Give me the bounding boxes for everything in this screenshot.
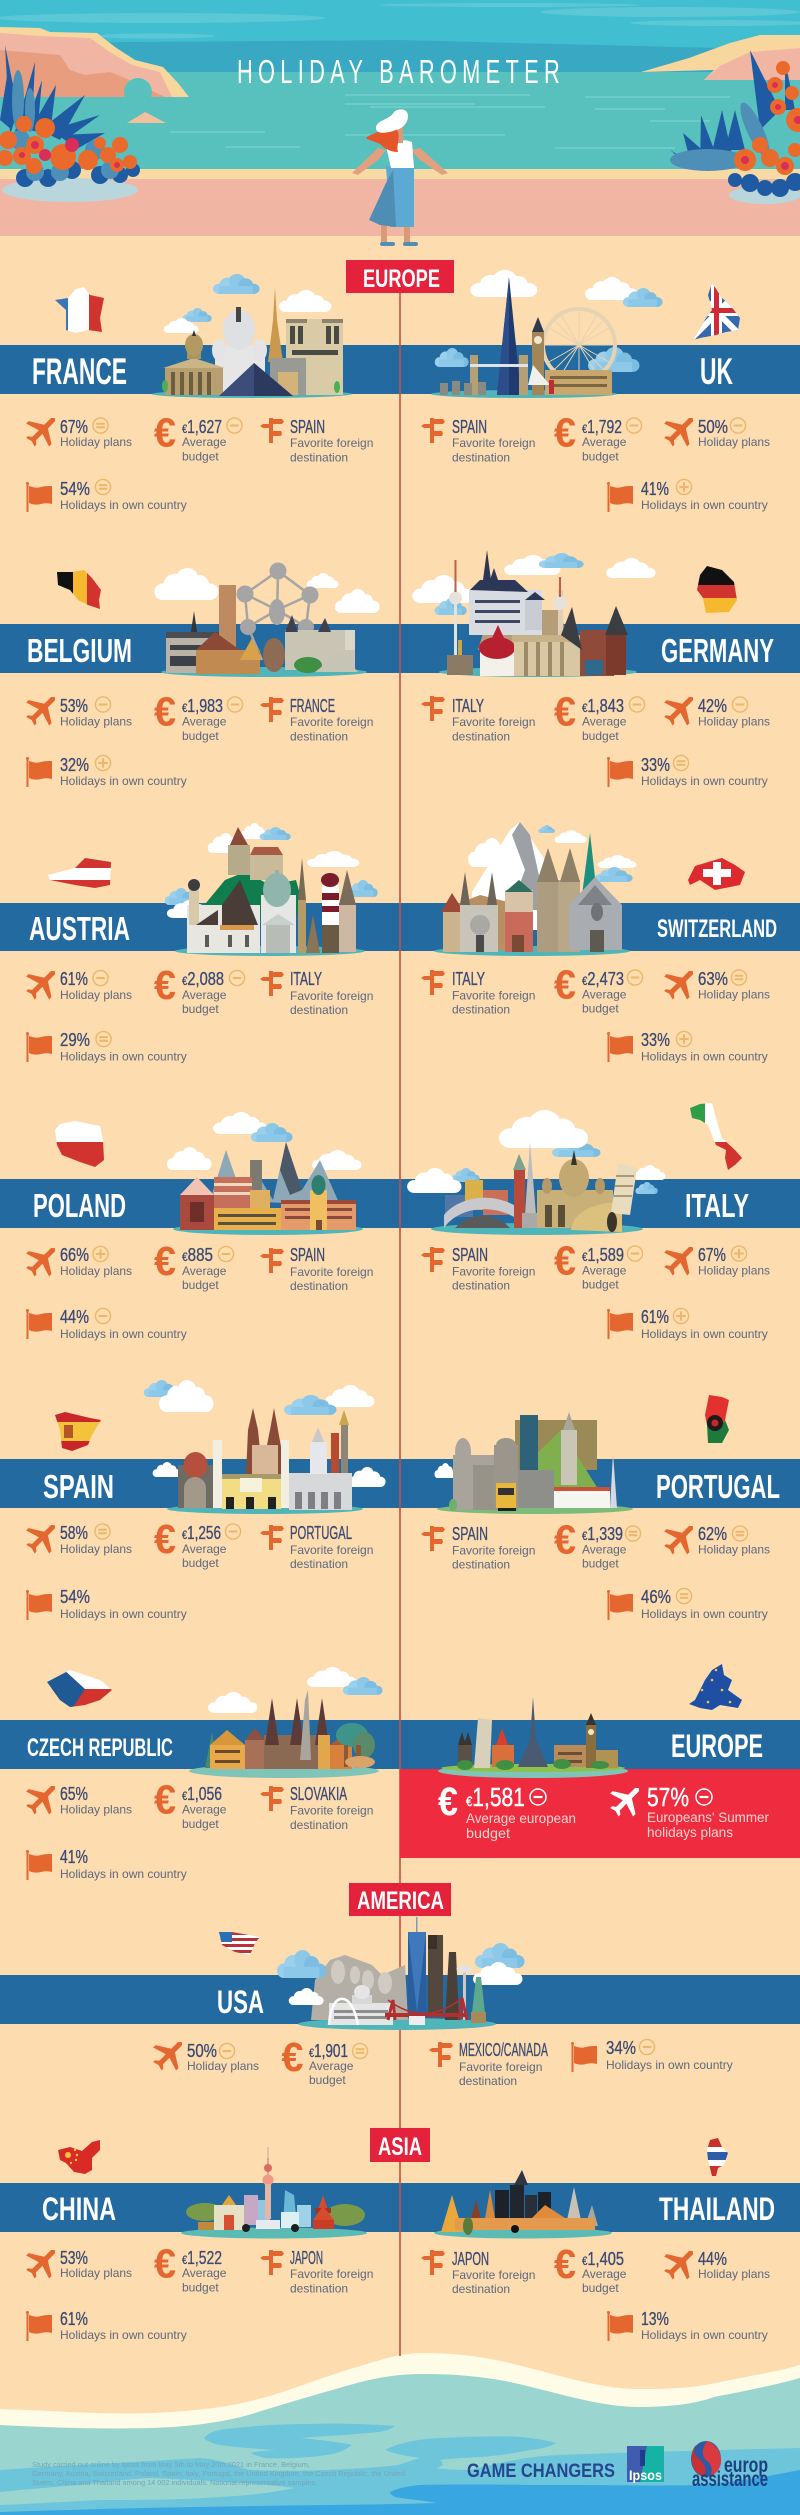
portugal own country <box>607 1587 768 1621</box>
europ assistance logo: europ <box>724 2454 768 2477</box>
portugal destination <box>421 1524 535 1572</box>
germany budget: budget <box>582 729 619 743</box>
usa name: USA <box>217 1984 264 2020</box>
thailand holiday plans: Holiday plans <box>698 2267 770 2281</box>
title: HOLIDAY BAROMETER <box>237 53 565 90</box>
poland destination <box>260 1245 373 1293</box>
usa holiday plans: Holiday plans <box>187 2059 259 2073</box>
ipsos logo: Ipsos <box>629 2467 662 2483</box>
poland own country <box>26 1307 187 1341</box>
poland holiday plans <box>19 1237 132 1284</box>
czech destination: destination <box>290 1818 348 1832</box>
belgium map flag <box>57 570 101 609</box>
italy budget: € <box>554 1238 576 1284</box>
study note <box>32 2460 405 2487</box>
uk destination: SPAIN <box>452 417 487 437</box>
czech budget: budget <box>182 1817 219 1831</box>
germany own country <box>607 755 768 788</box>
italy holiday plans: 67% <box>698 1245 726 1265</box>
china budget: Average <box>182 2266 227 2280</box>
austria own country: Holidays in own country <box>60 1050 187 1064</box>
belgium budget: Average <box>182 714 227 728</box>
italy own country: 61% <box>641 1307 669 1327</box>
uk destination: destination <box>452 450 510 464</box>
spain budget <box>154 1516 241 1570</box>
europe landmarks <box>438 1697 628 1778</box>
usa destination: destination <box>459 2074 517 2088</box>
italy map flag <box>690 1103 742 1170</box>
thailand holiday plans <box>657 2240 770 2287</box>
belgium budget: €1,983 <box>182 696 223 716</box>
poland holiday plans: 66% <box>60 1245 89 1265</box>
italy holiday plans <box>657 1236 770 1283</box>
euro average budget: budget <box>466 1825 510 1841</box>
austria budget: budget <box>182 1002 219 1016</box>
italy destination: SPAIN <box>452 1245 488 1265</box>
switzerland budget <box>554 962 643 1016</box>
poland holiday plans: Holiday plans <box>60 1264 132 1278</box>
france budget: €1,627 <box>182 417 222 437</box>
poland destination: destination <box>290 1279 348 1293</box>
thailand destination: destination <box>452 2282 510 2296</box>
right cliff <box>641 35 800 80</box>
germany destination <box>421 696 535 744</box>
czech budget <box>154 1776 227 1831</box>
czech map flag <box>47 1670 112 1707</box>
thailand holiday plans: 44% <box>698 2249 727 2269</box>
usa destination <box>429 2040 548 2088</box>
austria own country: 29% <box>60 1030 90 1050</box>
france budget: Average <box>182 435 227 449</box>
germany own country: 33% <box>641 755 670 775</box>
austria budget: € <box>154 962 176 1008</box>
belgium holiday plans: Holiday plans <box>60 714 132 728</box>
portugal budget: Average <box>582 1542 627 1556</box>
spain destination: destination <box>290 1557 348 1571</box>
usa destination: MEXICO/CANADA <box>459 2040 548 2060</box>
germany landmarks <box>412 550 655 677</box>
summer holiday plans: Europeans' Summer <box>647 1809 769 1825</box>
usa landmarks <box>277 1917 524 2030</box>
china destination <box>260 2248 373 2296</box>
spain destination: PORTUGAL <box>290 1523 352 1543</box>
austria destination: Favorite foreign <box>290 989 373 1003</box>
usa holiday plans <box>146 2031 259 2078</box>
china budget: budget <box>182 2280 219 2294</box>
poland budget: €885 <box>182 1245 213 1265</box>
country bands <box>0 345 800 2232</box>
usa budget: budget <box>309 2073 346 2087</box>
czech budget: € <box>154 1776 176 1822</box>
summer holiday plans <box>603 1777 769 1840</box>
spain destination <box>260 1523 373 1571</box>
tag: america: AMERICA <box>357 1887 444 1915</box>
portugal budget: € <box>554 1516 576 1562</box>
portugal own country: Holidays in own country <box>641 1607 768 1621</box>
tag: asia <box>370 2128 430 2162</box>
usa budget: Average <box>309 2059 354 2073</box>
portugal destination: SPAIN <box>452 1524 488 1544</box>
switzerland own country <box>607 1030 768 1064</box>
italy budget: €1,589 <box>582 1245 624 1265</box>
belgium destination: FRANCE <box>290 696 335 716</box>
switzerland holiday plans: 63% <box>698 969 728 989</box>
belgium holiday plans: 53% <box>60 696 88 716</box>
portugal destination: Favorite foreign <box>452 1544 535 1558</box>
czech budget: €1,056 <box>182 1784 222 1804</box>
switzerland destination: Favorite foreign <box>452 988 535 1002</box>
switzerland landmarks <box>434 822 637 956</box>
thailand budget: Average <box>582 2267 627 2281</box>
europe red panel <box>400 1769 800 1858</box>
china destination: JAPON <box>290 2248 323 2268</box>
belgium landmarks <box>154 562 380 677</box>
usa destination: Favorite foreign <box>459 2060 542 2074</box>
china holiday plans <box>19 2239 132 2286</box>
china destination: destination <box>290 2282 348 2296</box>
uk holiday plans <box>657 407 770 454</box>
france budget: € <box>154 410 176 456</box>
germany map flag <box>697 566 737 613</box>
uk budget: Average <box>582 435 627 449</box>
portugal holiday plans: 62% <box>698 1524 727 1544</box>
thailand landmarks <box>434 2170 612 2238</box>
belgium own country: 32% <box>60 755 89 775</box>
study note: States, China and Thailand among 14 002 individuals. National representative samples. <box>32 2478 317 2487</box>
euro average budget: Average european <box>466 1810 576 1826</box>
austria own country <box>26 1030 187 1064</box>
tag: america <box>349 1883 451 1916</box>
france map flag <box>55 285 105 335</box>
germany budget: € <box>554 688 576 734</box>
thailand map flag <box>707 2138 728 2176</box>
switzerland holiday plans: Holiday plans <box>698 988 770 1002</box>
uk own country: 41% <box>641 479 669 499</box>
uk budget: €1,792 <box>582 417 622 437</box>
portugal budget <box>554 1516 641 1570</box>
czech holiday plans: 65% <box>60 1784 88 1804</box>
usa own country: Holidays in own country <box>606 2058 733 2072</box>
china budget <box>154 2240 227 2294</box>
uk budget: € <box>554 410 576 456</box>
uk budget <box>554 410 642 464</box>
thailand own country <box>607 2309 768 2342</box>
switzerland own country: Holidays in own country <box>641 1050 768 1064</box>
spain destination: Favorite foreign <box>290 1543 373 1557</box>
usa own country <box>571 2038 733 2072</box>
austria destination: ITALY <box>290 969 322 989</box>
china holiday plans: 53% <box>60 2248 88 2268</box>
spain map flag <box>55 1412 101 1451</box>
italy budget: Average <box>582 1264 627 1278</box>
austria budget <box>154 962 245 1016</box>
czech holiday plans <box>19 1775 132 1822</box>
uk name: UK <box>700 351 733 392</box>
thailand destination: Favorite foreign <box>452 2268 535 2282</box>
poland budget: budget <box>182 1278 219 1292</box>
spain own country: Holidays in own country <box>60 1607 187 1621</box>
italy landmarks <box>407 1110 666 1235</box>
footer waves <box>0 2353 800 2515</box>
france landmarks <box>152 274 352 398</box>
china own country: 61% <box>60 2309 88 2329</box>
belgium destination: destination <box>290 730 348 744</box>
austria budget: Average <box>182 988 227 1002</box>
belgium destination: Favorite foreign <box>290 715 373 729</box>
left flowers <box>0 45 140 202</box>
czech budget: Average <box>182 1802 227 1816</box>
thailand destination: JAPON <box>452 2249 489 2269</box>
france destination: Favorite foreign <box>290 436 373 450</box>
portugal budget: budget <box>582 1556 619 1570</box>
uk own country: Holidays in own country <box>641 498 768 512</box>
spain own country: 54% <box>60 1587 90 1607</box>
germany budget: €1,843 <box>582 696 624 716</box>
china own country <box>26 2309 187 2342</box>
switzerland destination: ITALY <box>452 969 485 989</box>
uk map flag <box>693 283 740 340</box>
france holiday plans: 67% <box>60 417 88 437</box>
belgium own country <box>26 755 187 788</box>
usa map flag <box>219 1932 260 1955</box>
tag: europe <box>346 260 454 293</box>
france destination <box>260 417 373 464</box>
poland budget: Average <box>182 1264 227 1278</box>
switzerland budget: €2,473 <box>582 969 624 989</box>
italy destination <box>421 1245 535 1292</box>
usa own country: 34% <box>606 2038 636 2058</box>
switzerland budget: Average <box>582 988 627 1002</box>
usa budget <box>282 2034 368 2087</box>
italy destination: destination <box>452 1278 510 1292</box>
belgium own country: Holidays in own country <box>60 774 187 788</box>
central divider line <box>399 293 401 2356</box>
france budget <box>154 410 242 464</box>
portugal map flag <box>705 1395 729 1443</box>
poland name: POLAND <box>33 1187 126 1224</box>
study note: Study carried out online by Ipsos from May 5th to May 20th 2021 in France, Belgium, <box>32 2460 310 2469</box>
switzerland budget: € <box>554 962 576 1008</box>
czech own country: 41% <box>60 1847 88 1867</box>
austria destination: destination <box>290 1003 348 1017</box>
left cliff <box>0 27 189 106</box>
spain name: SPAIN <box>43 1468 114 1505</box>
china own country: Holidays in own country <box>60 2328 187 2342</box>
belgium budget: budget <box>182 729 219 743</box>
china landmarks <box>181 2147 367 2238</box>
usa budget: €1,901 <box>309 2041 348 2061</box>
europ assistance logo: assistance <box>692 2468 768 2491</box>
uk destination: Favorite foreign <box>452 436 535 450</box>
france own country: Holidays in own country <box>60 498 187 512</box>
poland map flag <box>55 1121 104 1167</box>
thailand budget: €1,405 <box>582 2249 624 2269</box>
france own country: 54% <box>60 479 90 499</box>
portugal own country: 46% <box>641 1587 671 1607</box>
thailand destination <box>421 2249 535 2296</box>
switzerland destination: destination <box>452 1002 510 1016</box>
study note: Germany, Austria, Switzerland, Poland, Spain, Italy, Portugal, the United Kingdom, the Czech Republic, the United <box>32 2469 405 2478</box>
spain budget: €1,256 <box>182 1523 221 1543</box>
czech holiday plans: Holiday plans <box>60 1802 132 1816</box>
germany destination: Favorite foreign <box>452 715 535 729</box>
czech destination: Favorite foreign <box>290 1804 373 1818</box>
tag: asia: ASIA <box>378 2133 422 2161</box>
poland budget <box>154 1238 234 1292</box>
austria holiday plans: 61% <box>60 969 88 989</box>
switzerland map flag <box>688 858 745 890</box>
portugal destination: destination <box>452 1558 510 1572</box>
poland landmarks <box>167 1112 363 1235</box>
germany holiday plans: Holiday plans <box>698 714 770 728</box>
germany budget <box>554 688 645 743</box>
austria holiday plans <box>19 960 132 1007</box>
thailand own country: Holidays in own country <box>641 2328 768 2342</box>
portugal holiday plans: Holiday plans <box>698 1542 770 1556</box>
portugal holiday plans <box>657 1515 770 1562</box>
china name: CHINA <box>42 2191 116 2227</box>
game changers logo: GAME CHANGERS <box>467 2461 615 2482</box>
belgium budget <box>154 688 243 743</box>
spain budget: Average <box>182 1542 227 1556</box>
france budget: budget <box>182 450 219 464</box>
portugal budget: €1,339 <box>582 1524 623 1544</box>
poland own country: 44% <box>60 1307 89 1327</box>
austria budget: €2,088 <box>182 969 224 989</box>
tag: europe: EUROPE <box>363 265 440 293</box>
portugal landmarks <box>434 1412 633 1514</box>
poland budget: € <box>154 1238 176 1284</box>
poland destination: Favorite foreign <box>290 1265 373 1279</box>
uk budget: budget <box>582 450 619 464</box>
china budget: €1,522 <box>182 2248 222 2268</box>
thailand budget: € <box>554 2241 576 2287</box>
czech destination: SLOVAKIA <box>290 1784 347 1804</box>
uk holiday plans: 50% <box>698 417 728 437</box>
header beach scene <box>0 0 800 246</box>
poland destination: SPAIN <box>290 1245 325 1265</box>
italy name: ITALY <box>685 1187 749 1224</box>
italy destination: Favorite foreign <box>452 1264 535 1278</box>
uk own country <box>607 479 768 512</box>
europe map <box>689 1664 742 1710</box>
europ assistance logo <box>691 2441 768 2491</box>
germany destination: ITALY <box>452 696 484 716</box>
germany holiday plans: 42% <box>698 696 727 716</box>
czech name: CZECH REPUBLIC <box>27 1734 173 1762</box>
belgium budget: € <box>154 688 176 734</box>
spain budget: budget <box>182 1556 219 1570</box>
summer holiday plans: 57% <box>647 1782 689 1812</box>
euro average budget <box>438 1780 576 1841</box>
china destination: Favorite foreign <box>290 2267 373 2281</box>
poland own country: Holidays in own country <box>60 1327 187 1341</box>
thailand own country: 13% <box>641 2309 669 2329</box>
czech landmarks <box>189 1667 383 1778</box>
switzerland budget: budget <box>582 1002 619 1016</box>
switzerland destination <box>421 969 535 1016</box>
usa holiday plans: 50% <box>187 2041 217 2061</box>
france holiday plans <box>19 407 132 454</box>
switzerland own country: 33% <box>641 1030 670 1050</box>
small rock <box>127 112 166 123</box>
austria name: AUSTRIA <box>29 910 130 947</box>
czech own country: Holidays in own country <box>60 1867 187 1881</box>
austria destination <box>260 969 373 1017</box>
spain holiday plans: 58% <box>60 1523 88 1543</box>
euro average budget: € <box>438 1780 458 1824</box>
china budget: € <box>154 2240 176 2286</box>
austria landmarks <box>165 823 378 956</box>
italy own country <box>607 1307 768 1341</box>
czech own country <box>26 1847 187 1881</box>
thailand budget: budget <box>582 2281 619 2295</box>
right flowers <box>670 50 800 204</box>
austria holiday plans: Holiday plans <box>60 988 132 1002</box>
summer holiday plans: holidays plans <box>647 1824 733 1840</box>
ipsos logo <box>627 2446 664 2483</box>
france name: FRANCE <box>32 351 127 392</box>
spain holiday plans <box>19 1514 132 1561</box>
spain own country <box>26 1587 187 1621</box>
spain landmarks <box>144 1380 386 1514</box>
italy own country: Holidays in own country <box>641 1327 768 1341</box>
usa budget: € <box>282 2034 304 2080</box>
germany own country: Holidays in own country <box>641 774 768 788</box>
czech destination <box>260 1784 373 1832</box>
switzerland holiday plans <box>657 960 770 1007</box>
woman <box>352 109 448 246</box>
italy budget <box>554 1238 643 1292</box>
france destination: SPAIN <box>290 417 325 437</box>
china holiday plans: Holiday plans <box>60 2266 132 2280</box>
uk holiday plans: Holiday plans <box>698 435 770 449</box>
france destination: destination <box>290 450 348 464</box>
uk destination <box>421 417 535 464</box>
belgium name: BELGIUM <box>27 632 132 669</box>
thailand budget <box>554 2241 627 2295</box>
china map flag <box>58 2140 100 2174</box>
italy holiday plans: Holiday plans <box>698 1264 770 1278</box>
germany holiday plans <box>657 686 770 733</box>
spain holiday plans: Holiday plans <box>60 1542 132 1556</box>
spain budget: € <box>154 1516 176 1562</box>
italy budget: budget <box>582 1278 619 1292</box>
germany budget: Average <box>582 714 627 728</box>
uk landmarks <box>431 270 663 398</box>
euro average budget: €1,581 <box>466 1782 525 1812</box>
belgium holiday plans <box>19 686 132 733</box>
france own country <box>26 479 187 512</box>
austria map flag <box>48 858 111 888</box>
germany destination: destination <box>452 730 510 744</box>
belgium destination <box>260 696 373 744</box>
france holiday plans: Holiday plans <box>60 435 132 449</box>
